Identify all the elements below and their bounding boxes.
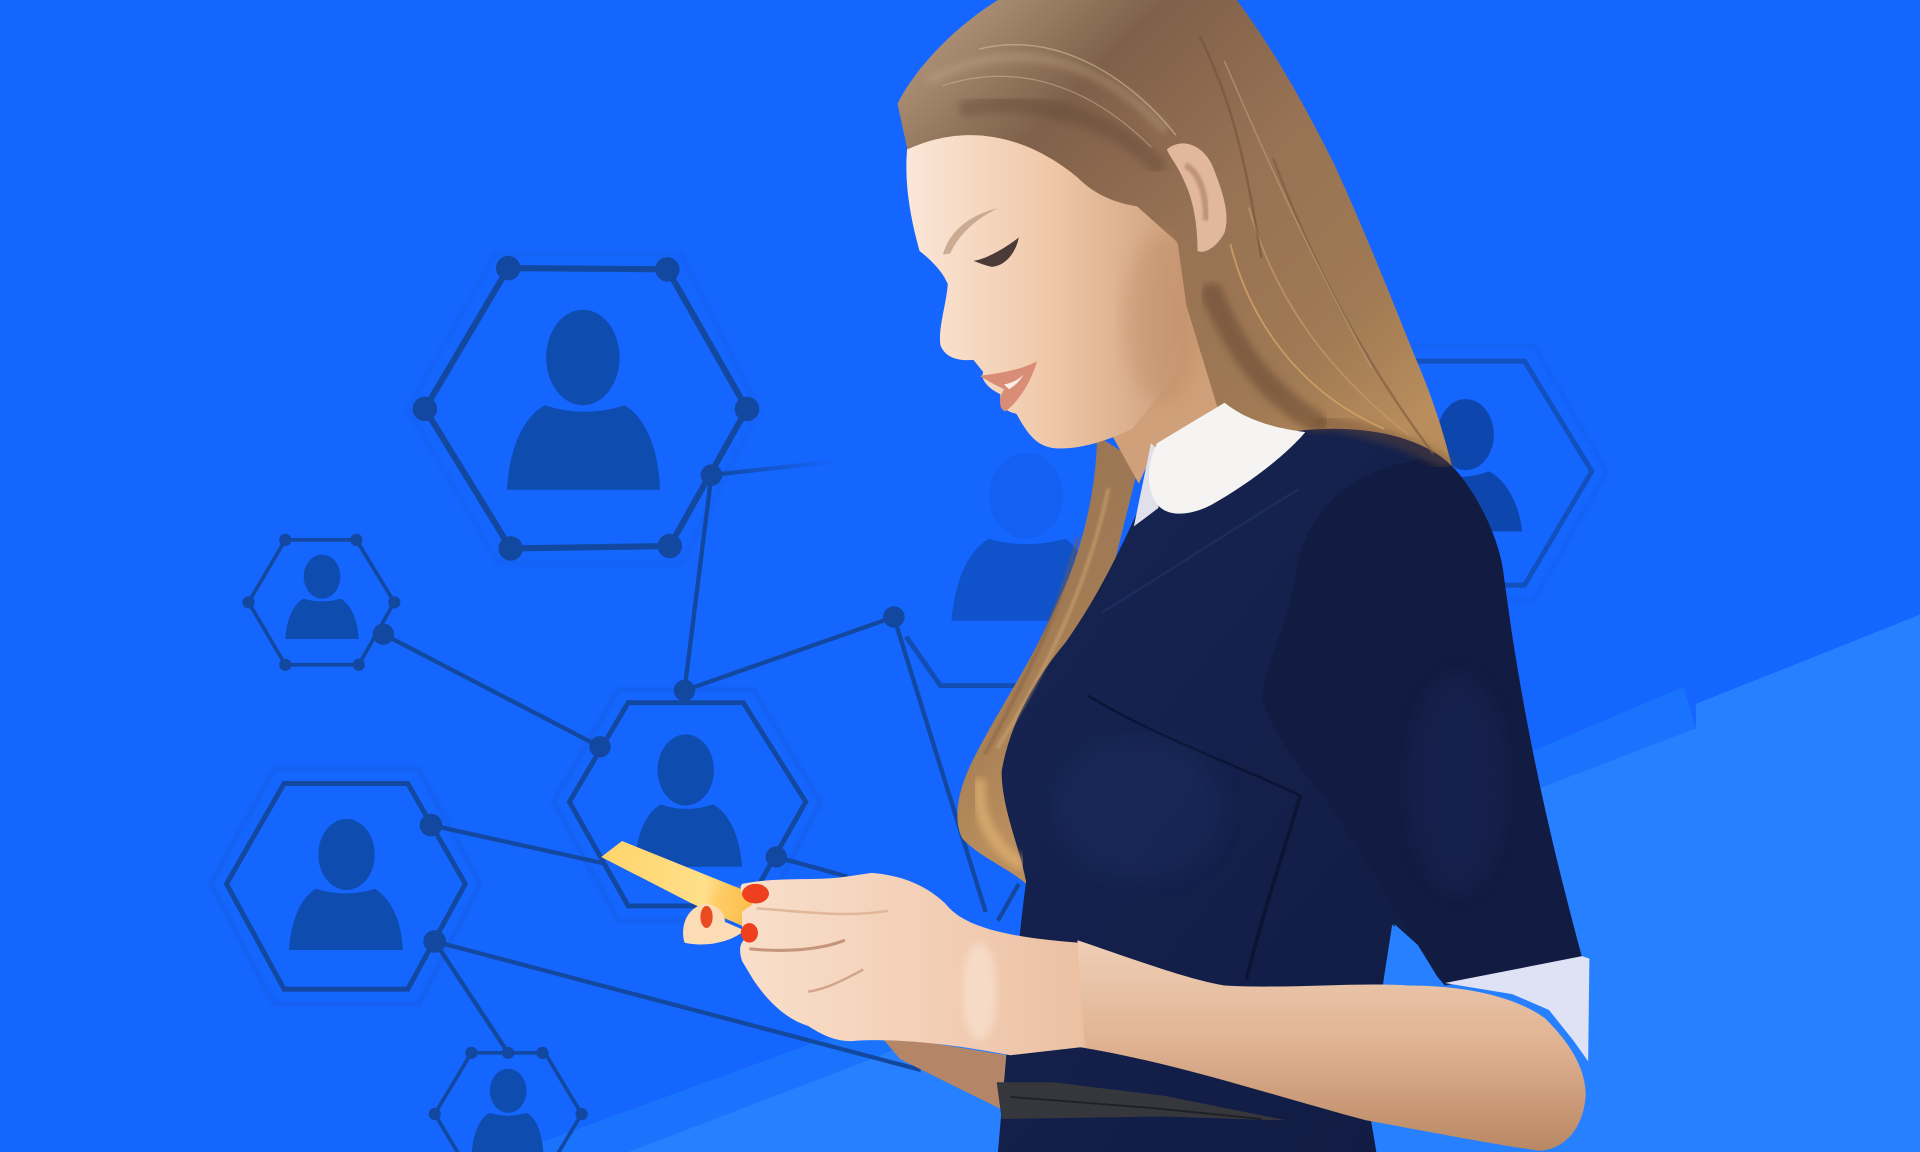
phone	[601, 841, 762, 928]
hand	[740, 873, 1085, 1055]
hexagon node: large person	[408, 253, 759, 563]
lips	[980, 361, 1037, 411]
hexagon node: bottom person	[429, 1047, 588, 1152]
network connection lines	[375, 462, 1019, 1070]
hexagon node: lower-left person	[211, 769, 480, 1004]
collar	[1134, 403, 1305, 526]
eye	[943, 208, 1019, 267]
long hair strands	[931, 37, 1445, 863]
dress body	[998, 429, 1582, 1152]
ear	[1167, 143, 1227, 252]
cheek shading	[1124, 233, 1202, 404]
face	[906, 127, 1194, 448]
sleeve cuff	[1445, 956, 1589, 1061]
hexagon node: faint person behind hair	[906, 453, 1097, 686]
belt	[997, 1082, 1286, 1120]
hexagon node: right person	[1408, 346, 1607, 600]
hexagon node: small person left	[242, 534, 400, 671]
front hair cap	[898, 0, 1269, 422]
red nails	[741, 884, 769, 943]
forearm	[1078, 940, 1586, 1151]
gap between arm and body	[1392, 924, 1445, 989]
thumb	[683, 903, 744, 945]
arm behind	[879, 1034, 1007, 1112]
background: diagonal lighter panels	[514, 615, 1920, 1152]
hexagon node: center person	[553, 689, 820, 921]
neck	[1090, 294, 1224, 484]
woman figure	[601, 0, 1589, 1152]
sleeve shading and seams	[1053, 459, 1582, 983]
back hair	[898, 0, 1452, 884]
